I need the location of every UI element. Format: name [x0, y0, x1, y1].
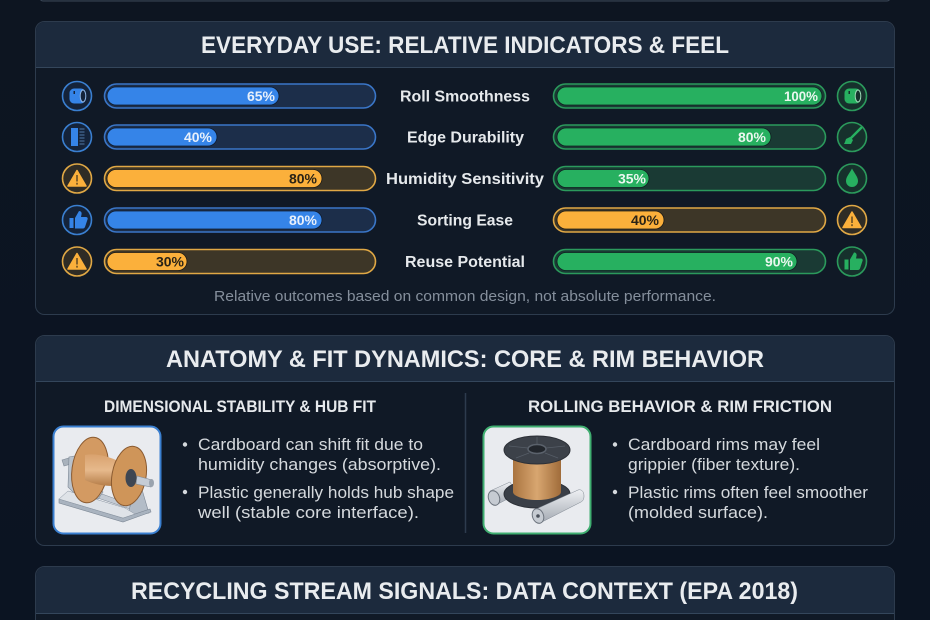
row: reuse potential: 90%: [765, 254, 793, 269]
panel: recycling stream signals: [36, 566, 894, 620]
row: reuse potential: 30%: [156, 254, 184, 269]
illustration: cardboard spool on stand: [54, 426, 160, 534]
row: roll smoothness: Roll Smoothness: [400, 88, 530, 106]
row: sorting ease: 40%: [631, 213, 659, 228]
left axle stub: [62, 457, 74, 466]
row: sorting ease: [62, 206, 866, 234]
bullets: dimensional stability: humidity changes (absorptive).: [198, 456, 441, 474]
stand base rail rear: [86, 489, 130, 509]
right axle: [136, 476, 152, 487]
right support: [127, 486, 149, 517]
row: humidity sensitivity: 35%: [618, 171, 646, 186]
bottom flange: [504, 480, 570, 508]
bullets: rolling behavior: [613, 436, 869, 522]
left flange: [68, 435, 112, 505]
row: humidity sensitivity: 80%: [289, 171, 317, 186]
row: humidity sensitivity: Humidity Sensitivity: [386, 171, 544, 188]
row: edge durability: [62, 122, 866, 152]
row: humidity sensitivity: [62, 164, 866, 193]
row: roll smoothness: 100%: [784, 89, 818, 104]
heading: everyday use: EVERYDAY USE: RELATIVE INDICATORS & FEEL: [201, 32, 729, 59]
bullets: dimensional stability: well (stable core interface).: [197, 504, 419, 522]
wound wire: [513, 454, 561, 500]
subheading: rolling behavior: ROLLING BEHAVIOR & RIM FRICTION: [528, 397, 832, 416]
right roller: [534, 490, 584, 523]
left roller: [490, 482, 517, 505]
right flange: [107, 444, 151, 508]
illustration: plastic spool with rollers: [484, 426, 590, 534]
row: edge durability: Edge Durability: [407, 130, 524, 146]
caption: Relative outcomes based on common design, not absolute performance.: [214, 289, 716, 305]
top flange: [504, 436, 570, 464]
row: roll smoothness: [62, 82, 866, 110]
row: roll smoothness: 65%: [247, 89, 275, 104]
bullets: rolling behavior: Cardboard rims may feel: [628, 436, 820, 454]
bullets: rolling behavior: grippier (fiber texture).: [628, 456, 800, 474]
heading: anatomy and fit: ANATOMY & FIT DYNAMICS: CORE & RIM BEHAVIOR: [166, 346, 764, 373]
panel: anatomy and fit: [36, 336, 894, 546]
bullets: dimensional stability: [183, 436, 454, 522]
left support: [68, 456, 103, 499]
core: [85, 454, 116, 486]
bullets: dimensional stability: Plastic generally holds hub shape: [198, 484, 454, 502]
row: edge durability: 40%: [184, 130, 212, 145]
row: sorting ease: Sorting Ease: [417, 212, 513, 230]
bullets: rolling behavior: (molded surface).: [628, 504, 768, 522]
stand base front: [59, 499, 151, 522]
panel: everyday use: [36, 22, 894, 314]
bullets: rolling behavior: Plastic rims often feel smoother: [628, 484, 869, 502]
row: sorting ease: 80%: [289, 213, 317, 228]
row: edge durability: 80%: [738, 130, 766, 145]
row: reuse potential: Reuse Potential: [405, 254, 525, 271]
row: reuse potential: [62, 247, 866, 276]
heading: recycling stream signals: RECYCLING STREAM SIGNALS: DATA CONTEXT (EPA 2018): [131, 578, 798, 605]
bullets: dimensional stability: Cardboard can shift fit due to: [198, 436, 423, 454]
subheading: dimensional stability: DIMENSIONAL STABILITY & HUB FIT: [104, 397, 377, 416]
